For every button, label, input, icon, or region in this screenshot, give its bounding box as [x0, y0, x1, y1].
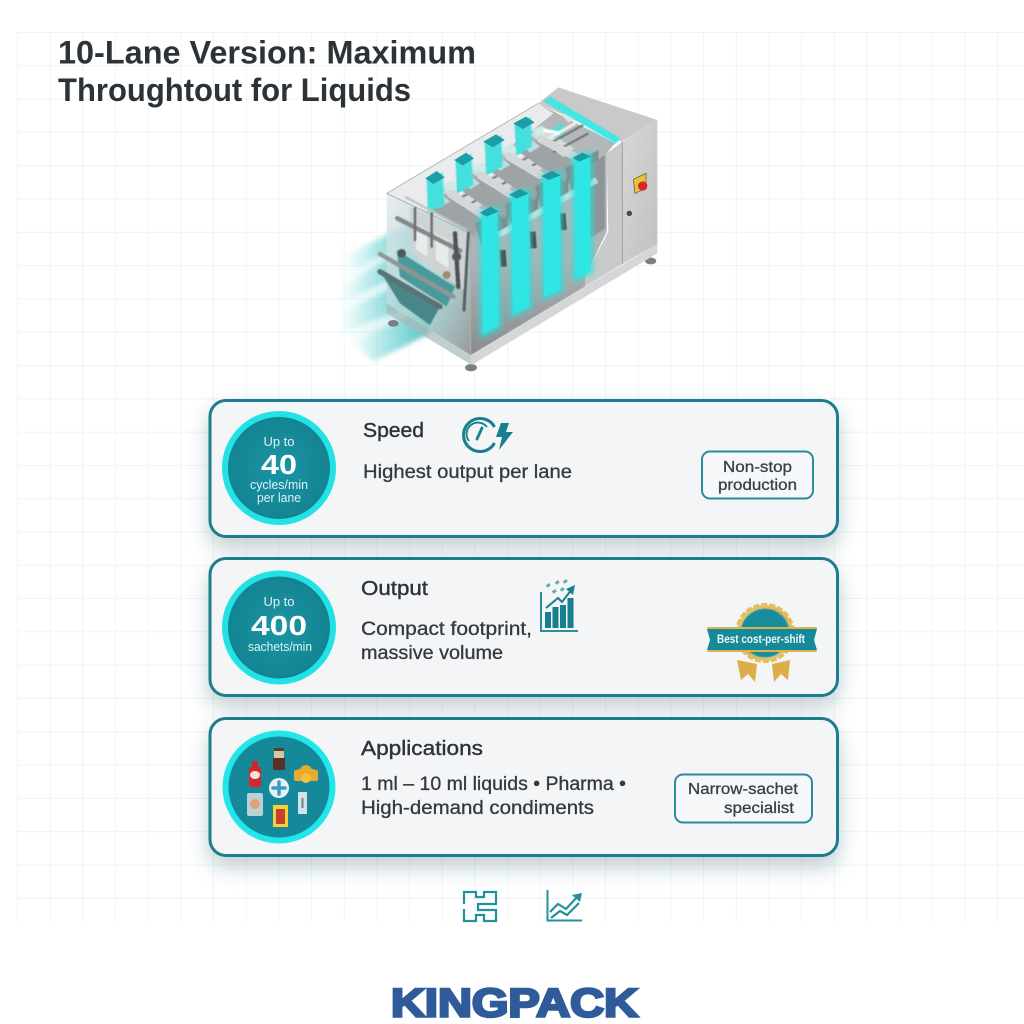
- icon: red sauce bottle: [249, 761, 261, 787]
- cabinet and enclosure: [387, 87, 657, 365]
- description: [361, 619, 532, 664]
- panel: output: [210, 558, 838, 696]
- repeating lane mechanism: [428, 109, 605, 280]
- emergency stop button: [627, 173, 647, 216]
- icon: rising bar chart: [541, 579, 578, 631]
- description: Highest output per lane: [363, 462, 572, 483]
- icon: footprint outline: [464, 892, 496, 921]
- card background: [210, 718, 838, 856]
- stat circle: 40 cycles/min: cycles/min: [250, 477, 308, 492]
- stat circle: 400 sachets/min: 400: [251, 610, 307, 641]
- stat circle: 400 sachets/min: sachets/min: [248, 639, 312, 654]
- stat circle: 40 cycles/min: 40: [261, 449, 297, 480]
- icon: yellow pack: [273, 805, 288, 827]
- icon: medical cross: [269, 778, 289, 798]
- stat circle: 40 cycles/min: Up to: [263, 434, 295, 449]
- machine illustration: [340, 87, 657, 371]
- front mechanism: [379, 197, 468, 325]
- description: Compact footprint,: [361, 619, 532, 640]
- heading: Output: [361, 578, 428, 600]
- tag: non-stop production: production: [718, 477, 797, 494]
- cross beams: [451, 139, 573, 214]
- title: [58, 34, 476, 108]
- rear cyan bars: [425, 117, 535, 213]
- panel: applications: [210, 718, 838, 856]
- panel: speed: [210, 400, 838, 536]
- description: [361, 774, 626, 819]
- description: High-demand condiments: [361, 798, 594, 819]
- stat circle: 40 cycles/min: [225, 414, 333, 522]
- description: massive volume: [361, 643, 503, 664]
- stat circle: 400 sachets/min: [225, 574, 333, 682]
- product circle: [226, 734, 332, 840]
- heading: Speed: [363, 420, 424, 442]
- front glowing bars: [480, 153, 591, 335]
- icon: growth line chart: [548, 890, 582, 920]
- cyan light strip: [542, 97, 621, 144]
- stat circle: 400 sachets/min: Up to: [263, 594, 295, 609]
- card background: [210, 400, 838, 536]
- icon: jar: [273, 748, 285, 770]
- heading: Applications: [361, 738, 483, 760]
- tag: narrow-sachet specialist: [675, 774, 812, 822]
- tag: non-stop production: [702, 452, 813, 498]
- machine feet: [388, 258, 656, 371]
- title: Throughtout for Liquids: [58, 72, 411, 108]
- stat circle: 40 cycles/min: per lane: [257, 490, 301, 505]
- badge: best cost per shift: [707, 605, 817, 682]
- icon: sachet: [298, 792, 307, 814]
- card background: [210, 558, 838, 696]
- tag: narrow-sachet specialist: specialist: [724, 800, 795, 817]
- tag: narrow-sachet specialist: Narrow-sachet: [688, 781, 799, 798]
- title: 10-Lane Version: Maximum: [58, 34, 476, 70]
- description: 1 ml – 10 ml liquids • Pharma •: [361, 774, 626, 795]
- teal motion streams: [340, 218, 430, 362]
- icon: speedometer with bolt: [464, 419, 513, 451]
- icon: gold coins: [294, 765, 318, 783]
- tag: non-stop production: Non-stop: [723, 459, 792, 476]
- badge: best cost per shift: Best cost-per-shift: [717, 634, 805, 646]
- icon: pouch: [247, 793, 263, 816]
